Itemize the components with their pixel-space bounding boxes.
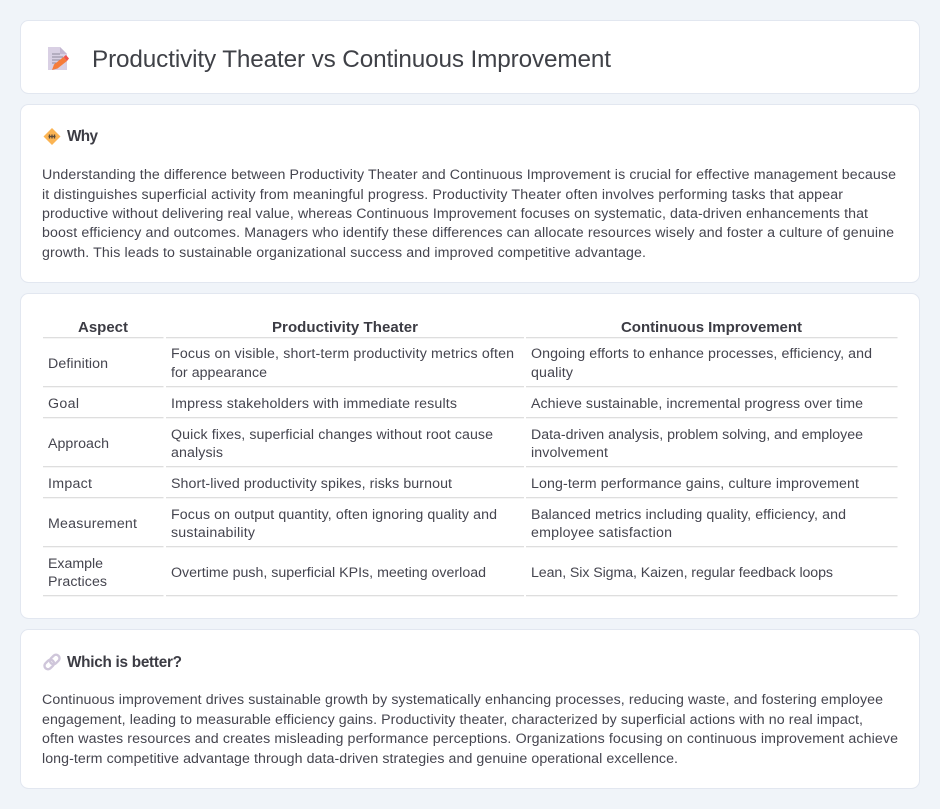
table row: definition — [48, 346, 872, 381]
text block: which is better paragraph: long-term competitive advantage through data-driven strategies and genuine operational excellence. — [42, 751, 678, 767]
table row: measurement: Focus on output quantity, often ignoring quality and — [171, 507, 497, 523]
table row: approach: Approach — [48, 436, 109, 452]
table row: definition: Focus on visible, short-term productivity metrics often — [171, 346, 514, 362]
title: Productivity Theater vs Continuous Improvement — [92, 46, 611, 73]
table row: measurement: sustainability — [171, 525, 256, 541]
table row: impact: Long-term performance gains, culture improvement — [531, 476, 859, 492]
text block: which is better paragraph: Continuous improvement drives sustainable growth by systematically enhancing processes, reducing waste, and fostering employee — [42, 692, 883, 708]
table row: definition: Ongoing efforts to enhance processes, efficiency, and — [531, 346, 872, 362]
table row: approach: analysis — [171, 445, 223, 461]
table row: example practices: Overtime push, superficial KPIs, meeting overload — [171, 565, 486, 581]
panel: comparison table — [20, 294, 920, 618]
table row: example practices: Example — [48, 556, 103, 572]
table row: example practices: Practices — [48, 574, 107, 590]
text block: why paragraph: Understanding the difference between Productivity Theater and Continuous Improvement is crucial for effective management because — [42, 167, 896, 183]
heading: which is better: Which is better? — [67, 654, 182, 671]
text block: why paragraph — [42, 167, 896, 261]
table row: definition: for appearance — [171, 365, 267, 381]
table row: goal — [48, 396, 863, 412]
table row: goal: Goal — [48, 396, 79, 412]
table row: approach: Quick fixes, superficial changes without root cause — [171, 427, 493, 443]
table row: measurement: Balanced metrics including quality, efficiency, and — [531, 507, 846, 523]
text block: why paragraph: productive without delivering real value, whereas Continuous Improvement focuses on systematic, data-driven enhancements that — [42, 206, 868, 222]
table row: definition: Definition — [48, 356, 108, 372]
icon: orange diamond sign — [44, 128, 60, 145]
icon: document with pencil — [48, 47, 69, 70]
text block: which is better paragraph: often wastes resources and creates misleading performance perceptions. Organizations focusing on continuous improvement achieve — [42, 731, 898, 747]
table row: goal: Impress stakeholders with immediate results — [171, 396, 457, 412]
heading: why: Why — [67, 128, 98, 145]
table row: approach: involvement — [531, 445, 608, 461]
table row: impact — [48, 476, 859, 492]
table row: measurement: Measurement — [48, 516, 137, 532]
panel: why — [20, 104, 920, 282]
text block: which is better paragraph — [42, 692, 898, 767]
table header row: Continuous Improvement — [621, 319, 802, 336]
table row: measurement — [48, 507, 846, 541]
panel: title header — [20, 20, 920, 94]
table row: goal: Achieve sustainable, incremental progress over time — [531, 396, 863, 412]
table row: impact: Impact — [48, 476, 92, 492]
text block: which is better paragraph: engagement, leading to measurable efficiency gains. Productivity theater, characterized by superficial actions with no real impact, — [42, 712, 863, 728]
table row: impact: Short-lived productivity spikes, risks burnout — [171, 476, 452, 492]
table row: approach — [48, 427, 863, 461]
icon: chain link — [43, 653, 61, 671]
table row: measurement: employee satisfaction — [531, 525, 672, 541]
text block: why paragraph: growth. This leads to sustainable organizational success and improved competitive advantage. — [42, 245, 646, 261]
text block: why paragraph: it distinguishes superficial activity from meaningful progress. Productivity Theater often involves performing tasks that appear — [42, 187, 843, 203]
table header row — [78, 319, 802, 336]
table row: example practices: Lean, Six Sigma, Kaizen, regular feedback loops — [531, 565, 833, 581]
table header row: Productivity Theater — [272, 319, 418, 336]
table row: definition: quality — [531, 365, 574, 381]
panel: which is better — [20, 630, 920, 788]
table row: example practices — [48, 556, 833, 590]
table row: approach: Data-driven analysis, problem solving, and employee — [531, 427, 863, 443]
table header row: Aspect — [78, 319, 128, 336]
text block: why paragraph: boost efficiency and outcomes. Managers who identify these differences can allocate resources wisely and foster a culture of genuine — [42, 225, 894, 241]
